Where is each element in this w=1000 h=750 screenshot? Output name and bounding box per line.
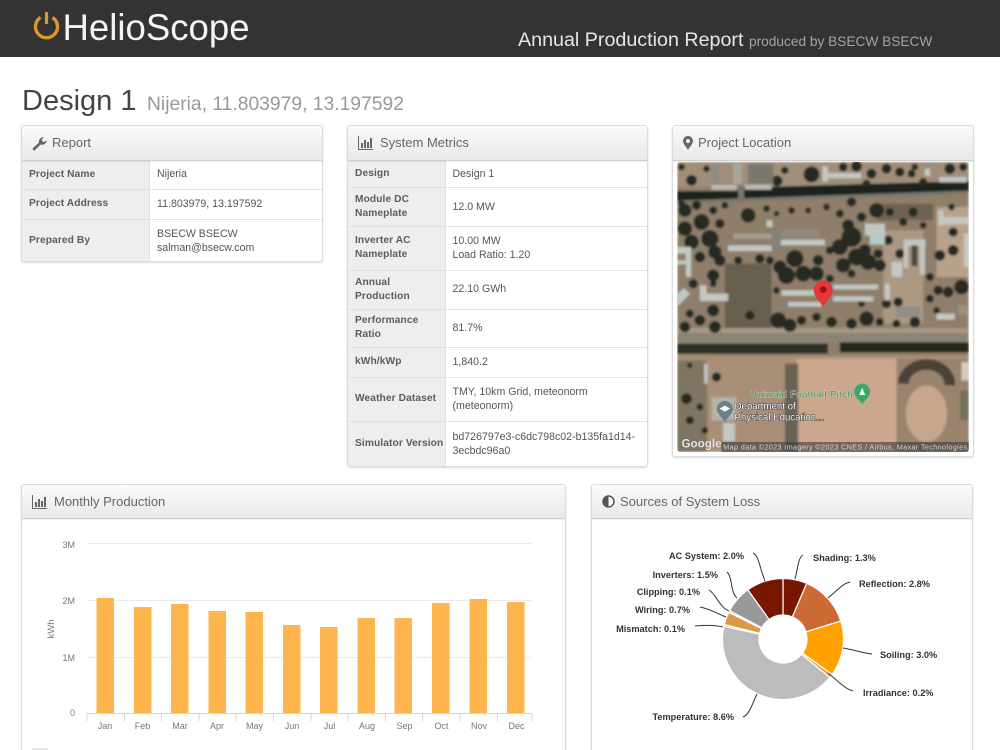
metrics table: Performance bbox=[355, 315, 418, 326]
slice labels: Wiring: 0.7% bbox=[635, 605, 690, 615]
icon: map pin bbox=[683, 136, 693, 150]
x axis labels: Oct bbox=[434, 721, 449, 731]
metrics table: kWh/kWp bbox=[355, 356, 402, 367]
metrics table: 81.7% bbox=[452, 322, 483, 334]
panel: report bbox=[21, 125, 322, 262]
header bar bbox=[0, 0, 1000, 57]
slice labels: Clipping: 0.1% bbox=[637, 587, 700, 597]
map label: department: Physical Education... bbox=[735, 412, 824, 423]
location marker bbox=[814, 280, 832, 308]
report table: Nijeria bbox=[157, 168, 187, 180]
project location heading bbox=[673, 126, 972, 160]
y axis labels: 3M bbox=[62, 540, 75, 550]
logo wordmark: HelioScope bbox=[62, 7, 250, 48]
leader lines bbox=[695, 553, 872, 717]
x axis labels: May bbox=[246, 721, 263, 731]
metrics table: bd726797e3-c6dc798c02-b135fa1d14- bbox=[452, 431, 635, 443]
monthly production heading bbox=[22, 485, 565, 519]
satellite map bbox=[677, 162, 969, 452]
y axis title: kWh bbox=[46, 620, 57, 638]
report heading bbox=[22, 126, 322, 160]
y axis labels: 1M bbox=[62, 653, 75, 663]
report table bbox=[22, 161, 322, 261]
metrics table: 22.10 GWh bbox=[452, 283, 506, 295]
map label: football pitch: Unimaid Football Pitch bbox=[750, 390, 852, 400]
report title: Annual Production Report bbox=[518, 29, 743, 51]
icon: bar chart bbox=[358, 136, 373, 150]
icon: power logo bbox=[34, 12, 60, 40]
x axis labels: Dec bbox=[508, 721, 525, 731]
design name: Design 1 bbox=[22, 85, 136, 117]
x axis labels: Apr bbox=[210, 721, 224, 731]
map label: department: Department of bbox=[735, 402, 796, 413]
map attribution strip bbox=[722, 442, 969, 452]
report heading: Report bbox=[52, 134, 91, 150]
tree row top bbox=[677, 181, 969, 202]
metrics table: (meteonorm) bbox=[452, 400, 513, 412]
metrics table: Module DC bbox=[355, 194, 409, 205]
tree clusters bbox=[678, 161, 969, 434]
x axis labels: Feb bbox=[135, 721, 150, 731]
slice labels: Shading: 1.3% bbox=[813, 553, 876, 563]
sources of system loss heading bbox=[592, 485, 972, 519]
slice labels: Inverters: 1.5% bbox=[653, 570, 718, 580]
metrics table: Load Ratio: 1.20 bbox=[452, 249, 530, 261]
system metrics heading: System Metrics bbox=[380, 134, 469, 150]
report table: salman@bsecw.com bbox=[157, 242, 254, 254]
map pin: football pitch bbox=[854, 384, 870, 404]
icon: wrench bbox=[32, 137, 46, 150]
panel: monthly production bbox=[21, 484, 566, 750]
metrics table: Nameplate bbox=[355, 208, 407, 219]
bars bbox=[96, 598, 524, 714]
slice labels: Mismatch: 0.1% bbox=[616, 624, 685, 634]
donut slices bbox=[722, 578, 844, 700]
metrics table: Annual bbox=[355, 276, 390, 288]
system metrics heading bbox=[348, 126, 646, 160]
panel: system metrics bbox=[347, 125, 648, 467]
south road and trees bbox=[677, 328, 969, 333]
metrics table: Nameplate bbox=[355, 249, 407, 260]
icon: half circle bbox=[602, 495, 615, 508]
monthly production heading: Monthly Production bbox=[54, 494, 165, 508]
metrics table: 1,840.2 bbox=[452, 356, 488, 368]
slice labels: Reflection: 2.8% bbox=[859, 579, 930, 589]
metrics table: TMY, 10km Grid, meteonorm bbox=[452, 386, 588, 398]
x axis labels bbox=[98, 721, 525, 731]
slice labels: Soiling: 3.0% bbox=[880, 650, 937, 660]
y axis labels bbox=[62, 540, 75, 718]
x axis labels: Aug bbox=[359, 721, 375, 731]
metrics table: Design 1 bbox=[452, 168, 494, 180]
north section bbox=[686, 175, 697, 186]
slice labels: AC System: 2.0% bbox=[669, 551, 744, 561]
sources of system loss heading: Sources of System Loss bbox=[620, 494, 760, 508]
report table: Project Address bbox=[29, 198, 108, 209]
page heading bbox=[22, 85, 404, 117]
produced by: produced by BSECW BSECW bbox=[749, 34, 932, 49]
metrics table: Design bbox=[355, 168, 390, 179]
metrics table: Simulator Version bbox=[355, 438, 443, 449]
report table: Project Name bbox=[29, 168, 95, 180]
panel: sources of system loss bbox=[591, 484, 973, 750]
x axis labels: Jun bbox=[285, 721, 299, 731]
satellite ground and buildings bbox=[673, 161, 969, 452]
icon: bar chart bbox=[32, 495, 47, 509]
x axis labels: Nov bbox=[471, 721, 487, 731]
report table: BSECW BSECW bbox=[157, 228, 238, 240]
report table: Prepared By bbox=[29, 235, 90, 246]
bar chart: monthly production bbox=[32, 540, 532, 750]
metrics table: Weather Dataset bbox=[355, 393, 436, 404]
project location heading: Project Location bbox=[698, 134, 791, 150]
metrics table: Production bbox=[355, 290, 410, 302]
metrics table bbox=[348, 161, 647, 466]
metrics table: 10.00 MW bbox=[452, 235, 501, 247]
x axis labels: Mar bbox=[172, 721, 188, 731]
slice labels: Temperature: 8.6% bbox=[652, 712, 734, 722]
slice labels: Irradiance: 0.2% bbox=[863, 688, 933, 698]
metrics table: Ratio bbox=[355, 329, 381, 340]
metrics table: 12.0 MW bbox=[452, 201, 495, 213]
donut chart: system loss bbox=[616, 551, 937, 722]
slice labels bbox=[616, 551, 937, 722]
y axis labels: 0 bbox=[70, 708, 75, 718]
map pin: department bbox=[717, 401, 733, 422]
report table: 11.803979, 13.197592 bbox=[157, 198, 262, 210]
design location: Nijeria, 11.803979, 13.197592 bbox=[147, 94, 404, 115]
x axis labels: Sep bbox=[396, 721, 413, 731]
panel: project location bbox=[672, 125, 974, 457]
buildings bbox=[673, 164, 969, 441]
google logo text: Google bbox=[682, 438, 722, 451]
y axis labels: 2M bbox=[62, 596, 75, 606]
map attribution text: Map data ©2023 Imagery ©2023 CNES / Airbus, Maxar Technologies bbox=[723, 442, 967, 451]
legend swatch bbox=[32, 748, 48, 750]
metrics table: 3ecbdc96a0 bbox=[452, 445, 510, 457]
x axis labels: Jan bbox=[98, 721, 112, 731]
metrics table: Inverter AC bbox=[355, 235, 411, 246]
x axis labels: Jul bbox=[324, 721, 335, 731]
